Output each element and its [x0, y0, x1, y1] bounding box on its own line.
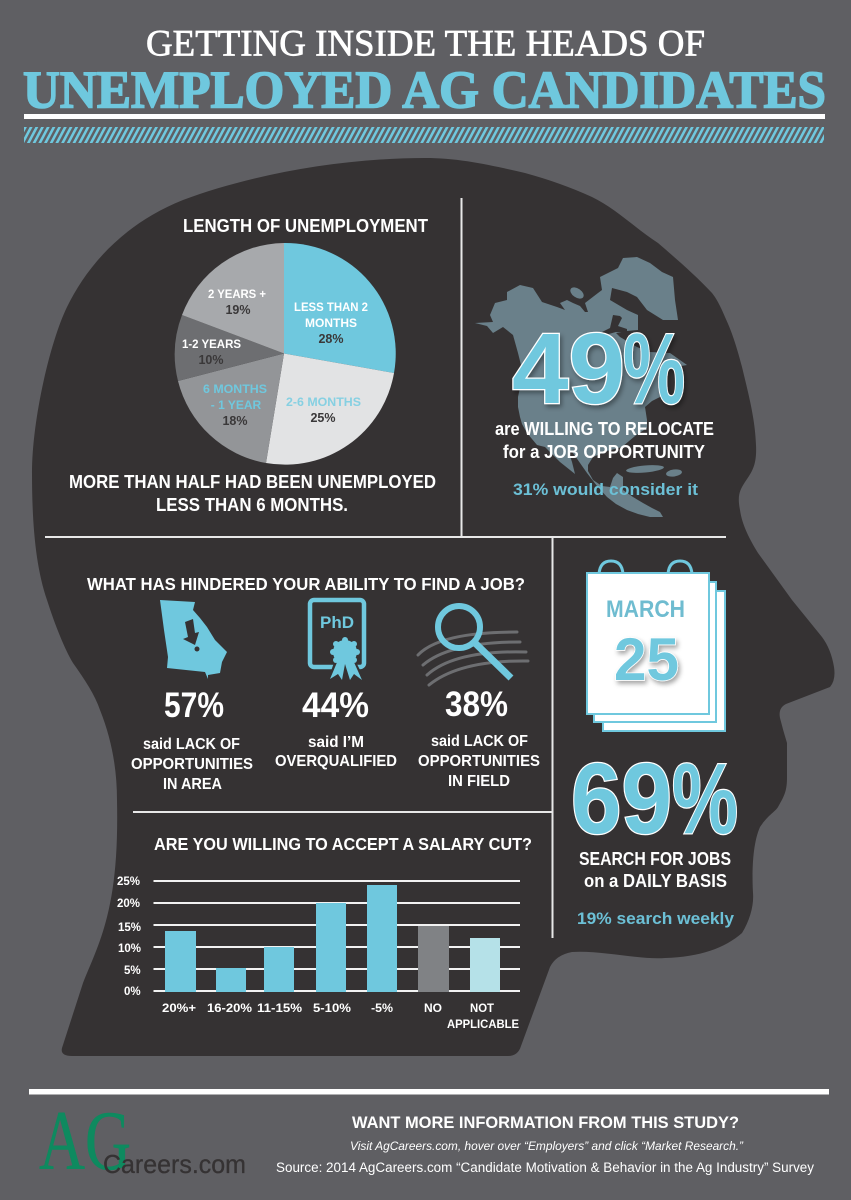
pie takeaway: LESS THAN 6 MONTHS.	[156, 494, 348, 515]
heading: length of unemployment: LENGTH OF UNEMPLOYMENT	[183, 216, 428, 236]
bar chart: NO	[424, 1003, 442, 1015]
stat: lack of opportunities in area	[131, 686, 253, 793]
icon: magnifier over field	[418, 606, 528, 685]
panel: length of unemployment	[69, 216, 436, 515]
logo: AgCareers.com: AG	[39, 1094, 131, 1188]
icon: Georgia state	[160, 600, 227, 679]
title: UNEMPLOYED AG CANDIDATES	[23, 62, 826, 120]
pie chart: MONTHS	[305, 316, 357, 330]
bar chart: APPLICABLE	[447, 1019, 519, 1031]
consider text: 31% would consider it	[513, 480, 698, 499]
relocate text: are WILLING TO RELOCATE	[495, 419, 714, 439]
daily search text	[579, 849, 731, 891]
pie chart: 25%	[310, 411, 336, 425]
bar chart: -5%	[371, 1003, 393, 1015]
map: North America	[475, 257, 687, 517]
footer text: WANT MORE INFORMATION FROM THIS STUDY?	[352, 1114, 739, 1132]
icon: calendar: 25	[614, 626, 679, 693]
pie chart: - 1 YEAR	[211, 398, 262, 412]
bar chart: 25%	[117, 876, 140, 888]
icon: calendar	[587, 561, 725, 731]
head silhouette	[32, 158, 834, 1056]
relocate text	[495, 419, 714, 462]
bar chart: 10%	[118, 943, 141, 955]
stat: lack of opportunities in field	[418, 685, 540, 790]
stat: lack of opportunities in field: OPPORTUNITIES	[418, 753, 540, 770]
bar chart: 5-10%	[313, 1003, 351, 1015]
bar chart	[117, 876, 520, 1031]
heading: hindered: WHAT HAS HINDERED YOUR ABILITY TO FIND A JOB?	[87, 574, 525, 594]
stat: 69%: %	[672, 743, 738, 855]
stat: overqualified: said I’M	[308, 734, 364, 751]
logo: AgCareers.com	[39, 1094, 246, 1188]
footer text	[276, 1114, 814, 1175]
stat: 49%	[512, 313, 685, 425]
footer text: Source: 2014 AgCareers.com “Candidate Motivation & Behavior in the Ag Industry” Survey	[276, 1160, 814, 1175]
pie takeaway: MORE THAN HALF HAD BEEN UNEMPLOYED	[69, 471, 436, 492]
heading: salary cut: ARE YOU WILLING TO ACCEPT A SALARY CUT?	[154, 834, 532, 854]
stat: lack of opportunities in field: IN FIELD	[448, 773, 510, 790]
stat: 49%: 49	[512, 313, 625, 425]
pie chart: 10%	[198, 353, 224, 367]
bar chart: 16-20%	[207, 1003, 252, 1015]
pie chart: 28%	[318, 332, 344, 346]
icon: PhD diploma	[310, 600, 366, 682]
bar chart: 11-15%	[257, 1003, 302, 1015]
stat: 69%	[571, 743, 738, 855]
bar chart: 0%	[124, 986, 141, 998]
icon: PhD diploma: PhD	[320, 613, 354, 632]
pie chart: 2-6 MONTHS	[286, 395, 361, 409]
stat: lack of opportunities in field: said LACK OF	[431, 733, 528, 750]
panel: salary cut	[117, 834, 532, 1031]
stat: 69%: 69	[571, 743, 672, 855]
bar chart: 20%+	[162, 1003, 196, 1015]
pie chart: 2 YEARS +	[208, 287, 266, 301]
pie chart: 6 MONTHS	[203, 382, 267, 396]
relocate text: for a JOB OPPORTUNITY	[503, 442, 705, 462]
stat: overqualified	[275, 686, 397, 770]
pie chart: 18%	[222, 414, 248, 428]
pie takeaway	[69, 471, 436, 515]
bar chart: 20%	[117, 898, 140, 910]
daily search text: on a DAILY BASIS	[584, 871, 727, 891]
stat: 49%: %	[623, 313, 685, 425]
pie chart	[175, 243, 396, 465]
pie chart: 1-2 YEARS	[182, 337, 241, 351]
pie chart: LESS THAN 2	[294, 300, 368, 314]
logo: AgCareers.com: Careers.com	[103, 1149, 246, 1179]
stat: lack of opportunities in area: 57%	[164, 686, 224, 725]
weekly search text: 19% search weekly	[577, 909, 735, 928]
bar chart: 5%	[124, 965, 141, 977]
stat: lack of opportunities in area: OPPORTUNITIES	[131, 756, 253, 773]
bar chart: 15%	[118, 922, 141, 934]
daily search text: SEARCH FOR JOBS	[579, 849, 731, 869]
stat: overqualified: 44%	[302, 686, 369, 725]
panel: hindrances	[87, 574, 540, 793]
stat: lack of opportunities in area: IN AREA	[163, 776, 222, 793]
title	[23, 24, 826, 143]
pie chart: 19%	[225, 303, 251, 317]
panel: job search frequency	[571, 561, 738, 928]
stat: lack of opportunities in field: 38%	[445, 685, 508, 724]
bar chart: NOT	[470, 1003, 494, 1015]
icon: calendar: MARCH	[606, 596, 685, 623]
panel: willing to relocate	[475, 257, 714, 517]
stat: lack of opportunities in area: said LACK OF	[143, 736, 240, 753]
stat: overqualified: OVERQUALIFIED	[275, 753, 397, 770]
title: GETTING INSIDE THE HEADS OF	[146, 24, 705, 64]
footer text: Visit AgCareers.com, hover over “Employers” and click “Market Research.”	[350, 1139, 744, 1153]
